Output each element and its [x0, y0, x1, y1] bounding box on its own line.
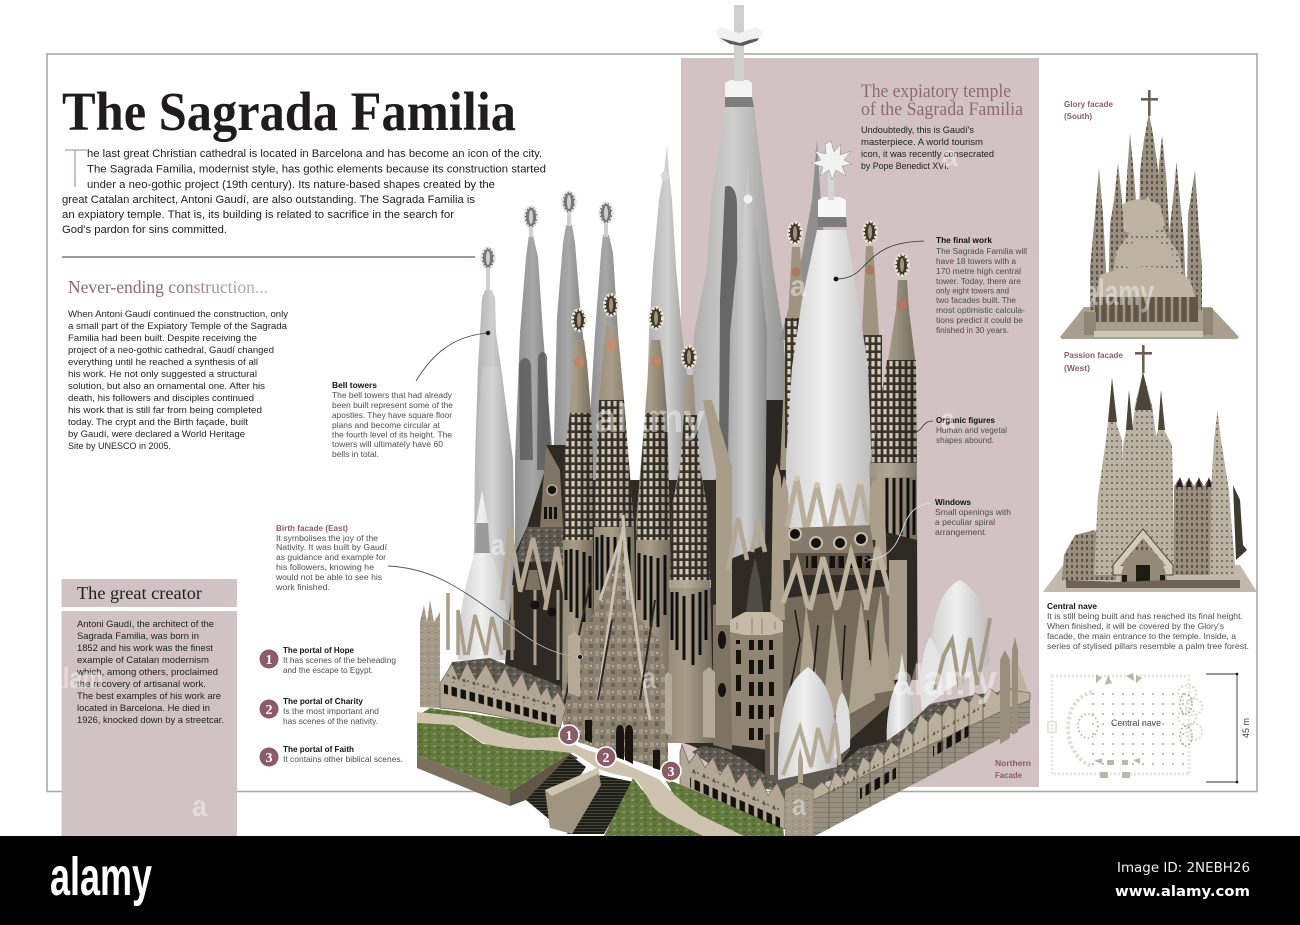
wall [813, 693, 1030, 837]
text block: never-ending construction: project of a neo-gothic cathedral, Gaudí changed [68, 345, 274, 356]
secondary gray tower [728, 167, 767, 560]
portal 2 legend: The portal of Charity [283, 696, 363, 706]
frames over big dome [772, 717, 840, 775]
portico [1113, 529, 1173, 575]
text block: expiatory temple: Undoubtedly, this is Gaudí's [861, 125, 974, 136]
callout: birth facade text: would not be able to see his [275, 572, 382, 582]
front tower 1 [562, 310, 593, 715]
icon: drop cap T [65, 150, 87, 187]
label: glory facade [1064, 99, 1113, 121]
callout: final work text: tower. Today, there are [936, 276, 1021, 286]
side and central towers [1122, 372, 1175, 575]
roof behind [442, 658, 566, 710]
text block: central nave: series of stylised pillars resemble a palm tree forest. [1047, 641, 1249, 651]
front right wall with gables [680, 745, 785, 829]
stairs [526, 755, 586, 820]
alamy logo: alamy [50, 847, 152, 907]
left nave frames over white cone [448, 593, 502, 655]
callout: bell towers text [332, 380, 453, 459]
portal 2 legend: 2 [266, 703, 272, 718]
text block: never-ending construction: his work that is still far from being completed [68, 405, 262, 416]
creator body text: the recovery of artisanal work. [77, 679, 206, 690]
callout: final work text: tions predict it could be [936, 315, 1023, 325]
divider [62, 256, 475, 258]
rose windows [790, 525, 875, 555]
text block: central nave: It is still being built and has reached its final height. [1047, 611, 1243, 621]
creator body text: 1852 and his work was the finest [77, 643, 213, 654]
portal 1 legend: 1 [266, 653, 272, 668]
grass block sides [417, 755, 510, 806]
text block: central nave: When finished, it will be covered by the Glory's [1047, 621, 1224, 631]
octagonal sacristy tower [730, 612, 783, 752]
image id: Image ID: 2NEBH26 [1117, 861, 1250, 876]
callout: windows [864, 497, 1011, 562]
vertical dividers [829, 698, 983, 829]
heading: expiatory temple: of the Sagrada Familia [861, 100, 1023, 120]
left tower [1094, 378, 1125, 575]
callout: organic figures [914, 415, 1007, 445]
callout: final work leader [834, 241, 924, 281]
portal 3 legend [260, 744, 403, 766]
callout: windows: a peculiar spiral [935, 517, 995, 527]
stair block [545, 768, 601, 834]
callout: birth facade text: as guidance and example for [276, 552, 386, 562]
callout: bell towers text: been built represent some of the [332, 400, 453, 410]
dimension: 45 m [1206, 673, 1251, 783]
nave right [1174, 478, 1214, 575]
left grass [417, 722, 575, 792]
brown bell towers behind [780, 222, 883, 480]
callout: windows: Windows [935, 497, 971, 507]
creator body text: example of Catalan modernism [77, 655, 209, 666]
text block: never-ending construction: everything until he reached a synthesis of all [68, 357, 258, 368]
text block: never-ending construction: Site by UNESCO in 2005. [68, 441, 171, 452]
left nave gothic gables [502, 445, 566, 680]
text block: never-ending construction: his work. He not only suggested a structural [68, 369, 257, 380]
callout: final work text: 170 metre high central [936, 266, 1021, 276]
gray planned bell towers [473, 145, 695, 640]
heading: expiatory temple [861, 82, 1023, 120]
website: www.alamy.com [1115, 884, 1250, 900]
intro text: The Sagrada Familia, modernist style, has gothic elements because its construction started [87, 164, 546, 176]
callout: bell towers leader [416, 331, 490, 381]
portal 1 legend [260, 645, 396, 675]
text block: expiatory temple: masterpiece. A world tourism [861, 137, 983, 148]
portal markers on building: 3 [668, 765, 674, 780]
heading: never-ending construction: Never-ending construction... [68, 277, 268, 297]
heading: expiatory temple: The expiatory temple [861, 82, 1011, 102]
portal 1 legend: The portal of Hope [283, 645, 354, 655]
text block: never-ending construction: When Antoni Gaudí continued the construction, only [68, 309, 288, 320]
corner tower [420, 600, 440, 708]
Mary tower with star [785, 141, 873, 570]
corner tower [785, 783, 813, 837]
portal markers on building: 1 [566, 729, 572, 744]
portal 2 legend [260, 696, 379, 726]
slanted roof band and pier beside front tower [703, 400, 732, 625]
lower A-frames [783, 547, 890, 610]
callout: birth facade text: Birth facade (East) [276, 523, 348, 533]
label: passion facade: (West) [1064, 363, 1090, 373]
gables band [813, 682, 1030, 800]
dark mottled spire [745, 558, 764, 620]
legend: portals [260, 645, 403, 766]
callout: birth facade text: It symbolises the joy of the [276, 533, 378, 543]
birth facade front towers [562, 294, 714, 743]
text block: never-ending construction: a small part of the Expiatory Temple of the Sagrada [68, 321, 288, 332]
callout: windows: arrangement. [935, 527, 987, 537]
upper grass [417, 708, 572, 742]
callout: bell towers text: bells in total. [332, 449, 379, 459]
callout: bell towers text: Bell towers [332, 380, 377, 390]
callout: final work text [936, 235, 1027, 335]
ground: grass, stairs and paths [417, 708, 784, 836]
watermark marks: a [941, 140, 958, 173]
dark gap between gray towers [765, 400, 790, 570]
stone underlay of lower right nave [770, 585, 895, 775]
callout: final work text: finished in 30 years. [936, 325, 1009, 335]
upper A-frames [787, 478, 868, 537]
right tower [1210, 410, 1236, 575]
callout: organic figures: Organic figures [936, 415, 995, 425]
callout: birth facade text: his followers, knowing he [276, 562, 374, 572]
rear nave dark body [505, 445, 917, 790]
dimension: 45 m: 45 m [1241, 718, 1251, 738]
front tower 2 [593, 294, 637, 715]
front tower 3 [636, 308, 671, 725]
callout: bell towers text: apostles. They have square floor [332, 410, 452, 420]
watermark marks: a [642, 662, 656, 695]
portal markers on building [559, 725, 681, 781]
watermark marks: a [941, 403, 955, 436]
callout: bell towers text: The bell towers that had already [332, 390, 453, 400]
plan label: Central nave [1111, 718, 1161, 729]
stone fill under corner roof [765, 720, 850, 800]
white sacristy domes on right [765, 580, 1030, 800]
stone underlay beside octagon [713, 600, 732, 750]
text block: never-ending construction: death, his followers and disciples continued [68, 393, 254, 404]
label: northern facade [995, 758, 1031, 780]
creator body text [76, 619, 224, 726]
right nave gothic gables [728, 463, 907, 725]
portal 1 legend: and the escape to Egypt. [283, 665, 373, 675]
watermark marks: alam [50, 662, 103, 695]
callout: birth facade leader [388, 566, 582, 659]
central tower of Jesus with cross [685, 5, 792, 620]
panel: expiatory temple background [681, 58, 1039, 787]
label: northern facade: Northern [995, 758, 1031, 768]
callout: final work text: only eight towers and [936, 286, 1009, 296]
creator body text: Antoni Gaudí, the architect of the [77, 619, 214, 630]
text block: expiatory temple: by Pope Benedict XVI. [861, 161, 949, 172]
label: passion facade: Passion facade [1064, 350, 1123, 360]
text block: expiatory temple: icon, it was recently consecrated [861, 149, 994, 160]
outer frame [47, 54, 1257, 792]
text block: central nave: facade, the main entrance to the temple. Inside, a [1047, 631, 1236, 641]
callout: final work text: have 18 towers with a [936, 256, 1016, 266]
callout: final work text: most optimistic calcula- [936, 305, 1025, 315]
tall lower spires [795, 590, 895, 725]
callout: organic figures: Human and vegetal [936, 425, 1007, 435]
right enclosure wall with gables [785, 637, 1030, 837]
watermark marks: a [792, 789, 806, 822]
frames over right dome [935, 618, 990, 690]
callout: birth facade text: Nativity. It was built by Gaudí [276, 542, 388, 552]
roof behind [816, 692, 1000, 785]
glory sculpture clouds [1110, 195, 1190, 300]
callout: bell towers text: the fourth level of its height. The [332, 430, 452, 440]
footer bar [0, 836, 1300, 925]
illustration: glory facade [1060, 90, 1239, 339]
intro text: God's pardon for sins committed. [62, 224, 227, 236]
watermark marks: a [491, 529, 505, 562]
title: The Sagrada Familia [62, 81, 516, 142]
creator body text: which, among others, proclaimed [76, 667, 218, 678]
callout: windows: Small openings with [935, 507, 1011, 517]
callout: final work text: two facades built. The [936, 295, 1016, 305]
end piers [1000, 637, 1018, 744]
portal markers on building: 2 [602, 751, 610, 766]
left enclosure wall with gables [420, 600, 566, 728]
watermark marks: a [790, 270, 806, 303]
callout: birth facade text [275, 523, 388, 592]
back gray tower [780, 140, 840, 340]
callout: final work text: The final work [936, 235, 992, 245]
illustration: Sagrada Familia cutaway building [417, 5, 1030, 837]
watermark marks: alamy [1084, 272, 1154, 313]
text block: never-ending construction [68, 309, 288, 452]
callout: bell towers text: plans and become circular at [332, 420, 441, 430]
tall pinnacles [771, 463, 887, 620]
panel: the great creator [62, 579, 237, 836]
creator body text: The best examples of his work are [77, 691, 221, 702]
small white cone tower on left [458, 490, 510, 660]
creator body text: 1926, knocked down by a streetcar. [77, 715, 224, 726]
text block: expiatory temple [861, 125, 994, 172]
text block: never-ending construction: Familia had been built. Despite receiving the [68, 333, 257, 344]
right front bell tower [869, 254, 918, 680]
illustration: passion facade [1043, 345, 1257, 592]
callout: final work text: The Sagrada Familia will [936, 246, 1027, 256]
portal 3 legend: The portal of Faith [283, 744, 354, 754]
label: northern facade: Facade [995, 770, 1022, 780]
portal 1 legend: It has scenes of the beheading [283, 655, 396, 665]
label: glory facade: Glory facade [1064, 99, 1113, 109]
intro text: an expiatory temple. That is, its building is related to sacrifice in the search for [62, 209, 454, 221]
intro text: great Catalan architect, Antoni Gaudí, are also outstanding. The Sagrada Familia is [62, 194, 475, 206]
watermark marks [50, 140, 1154, 823]
portal 3 legend: It contains other biblical scenes. [283, 754, 403, 764]
callout: organic figures: shapes abound. [936, 435, 994, 445]
heading: the great creator: The great creator [77, 583, 202, 603]
portal 3 legend: 3 [266, 751, 272, 766]
text block: central nave [1047, 601, 1249, 651]
intro text: he last great Christian cathedral is located in Barcelona and has become an icon of the city. [87, 148, 542, 160]
portal 2 legend: has scenes of the nativity. [283, 716, 378, 726]
text block: never-ending construction: today. The crypt and the Birth façade, built [68, 417, 248, 428]
callout: bell towers text: towers will ultimately have 60 [332, 439, 443, 449]
window row [790, 553, 874, 575]
watermark marks: a [192, 790, 207, 823]
intro text [62, 148, 546, 236]
text block: never-ending construction: solution, but also an ornamental one. After his [68, 381, 265, 392]
portal 2 legend: Is the most important and [283, 706, 379, 716]
front tower 4 [667, 346, 714, 743]
text block: central nave: Central nave [1047, 601, 1097, 611]
label: glory facade: (South) [1064, 111, 1092, 121]
creator body text: located in Barcelona. He died in [77, 703, 210, 714]
glory towers [1090, 113, 1202, 310]
right grass [604, 778, 706, 836]
roof behind [692, 746, 785, 792]
birth facade central portal sculpture [559, 510, 715, 772]
path [417, 712, 744, 836]
callout: birth facade text: work finished. [275, 582, 330, 592]
intro text: under a neo-gothic project (19th century). Its nature-based shapes created by the [87, 179, 495, 191]
watermark marks: alamy [893, 656, 997, 705]
floor plan: central nave [1048, 673, 1202, 778]
watermark marks: alamy [595, 397, 706, 441]
label: passion facade [1064, 350, 1123, 373]
text block: never-ending construction: by Gaudí, were declared a World Heritage [68, 429, 245, 440]
creator body text: Sagrada Familia, was born in [77, 631, 199, 642]
